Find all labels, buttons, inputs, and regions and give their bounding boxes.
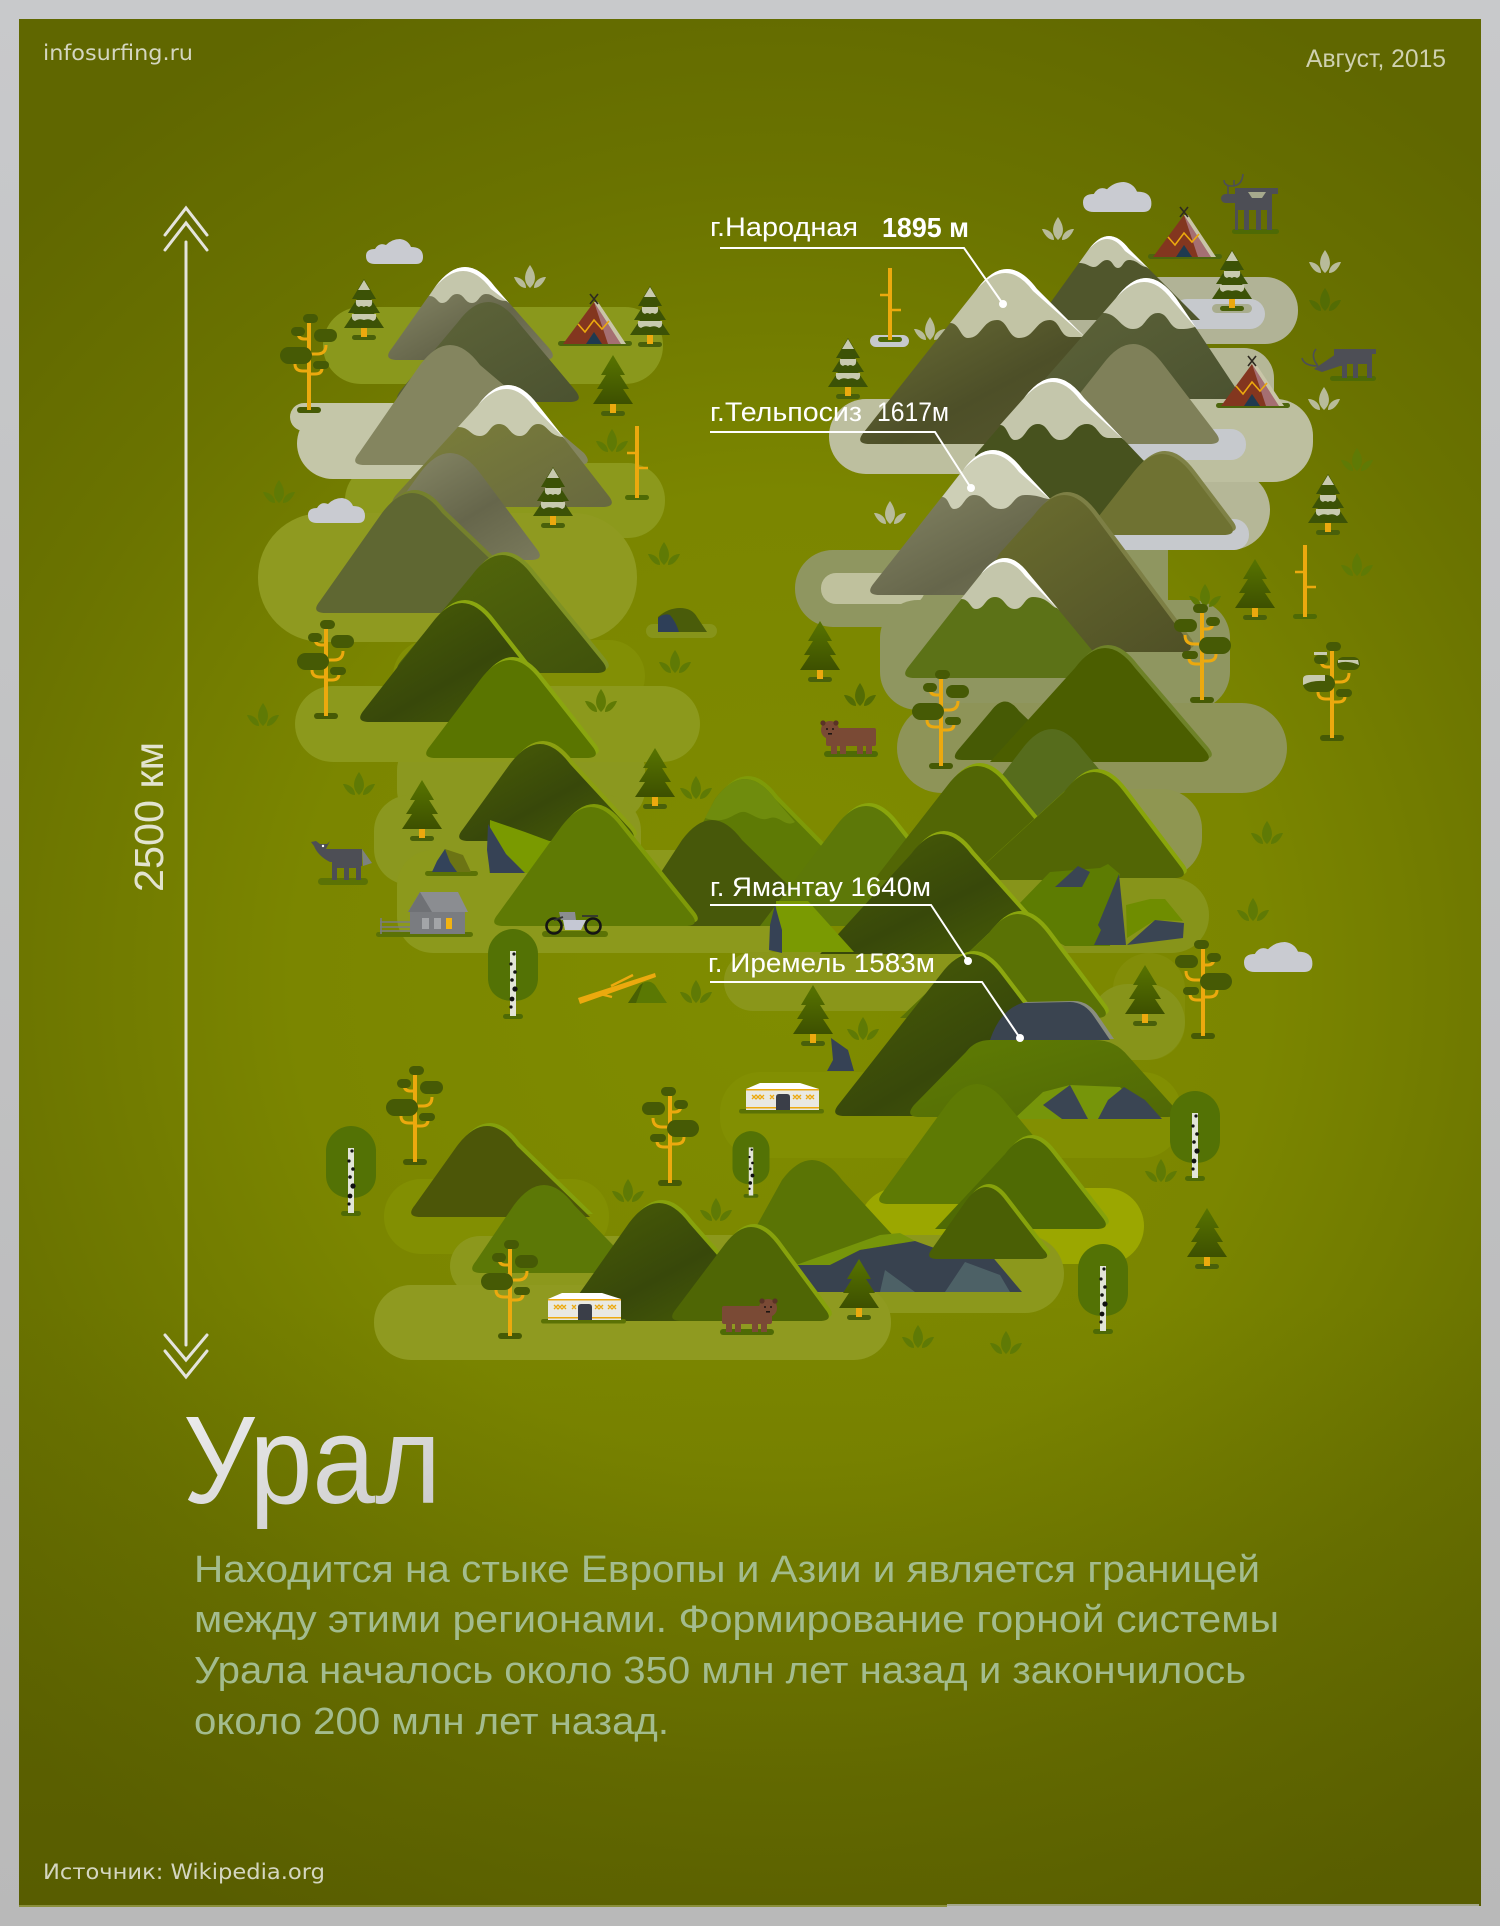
callout: Yamantau [710, 872, 972, 965]
icon: cloud [366, 239, 423, 264]
icon: birch [1078, 1244, 1128, 1334]
distance label: 2500 км [126, 742, 172, 892]
terrain bands: soft rounded land and snow fields [258, 277, 1313, 1360]
mountain: moss peak [960, 492, 1194, 652]
description text block [194, 1549, 1279, 1743]
icon: chum tent [1148, 207, 1222, 259]
site name: infosurfing.ru [43, 41, 193, 65]
sprout behind Narodnaya [914, 317, 946, 340]
description text block: Находится на стыке Европы и Азии и является границей [194, 1549, 1260, 1591]
callout: Telposiz [710, 397, 975, 492]
mountain: small dark peak [955, 702, 1070, 760]
callout: Iremel [708, 948, 1024, 1042]
icon: snowy spruce [1308, 474, 1348, 535]
mountain: far snowy peak [1038, 236, 1200, 320]
callout: Narodnaya: 1895 м [882, 212, 969, 243]
icon: cloud [1083, 182, 1151, 212]
icon: spruce [1125, 965, 1165, 1026]
broad green ridge with rocks [910, 1040, 1176, 1119]
icon: bear [820, 720, 878, 757]
icon: pine mirrored [1175, 940, 1232, 1039]
mountain: deep green peak [360, 600, 567, 722]
icon: spruce [1187, 1208, 1227, 1269]
icon: birch [488, 929, 538, 1019]
icon: snowy spruce [828, 338, 868, 399]
mound and fallen tree [578, 973, 667, 1004]
icon: yurt [739, 1083, 824, 1114]
icon: motorbike [542, 912, 608, 937]
callout: Narodnaya [710, 212, 1007, 308]
mountain: Narodnaya [860, 269, 1184, 444]
mountains: southern range [411, 1084, 1109, 1321]
mountain: dark peak in front [626, 820, 830, 926]
icon: spruce [793, 985, 833, 1046]
icon: snowy pine [1303, 642, 1360, 741]
rock slab [487, 820, 562, 873]
callout: Iremel: г. Иремель 1583м [708, 948, 935, 978]
icon: cloud [308, 498, 365, 523]
icon: dead tree on ice [870, 268, 909, 347]
mountain: grey peak [1040, 344, 1219, 444]
mountain: south front peak [672, 1224, 832, 1321]
mountain: south large peak [879, 1084, 1090, 1204]
mountain: middle peak [760, 803, 978, 926]
icon: snowy spruce [533, 467, 573, 528]
mountain: south dark peak [560, 1200, 778, 1321]
mountain: far right central [970, 769, 1187, 878]
mountain: large dark green peak [990, 645, 1212, 762]
mountain: grey peak [355, 345, 588, 465]
small rock with lower pill [425, 849, 478, 876]
callout: Narodnaya: г.Народная [710, 212, 858, 242]
mountain: south green peak [472, 1185, 640, 1273]
description text block: около 200 млн лет назад. [194, 1701, 669, 1743]
icon: pine [481, 1240, 538, 1339]
mountain: dark peak [397, 302, 579, 402]
icon: spruce [800, 621, 840, 682]
icon: spruce [593, 355, 633, 416]
mountain: south central peak [720, 1160, 945, 1292]
icon: birch [326, 1126, 376, 1216]
mountain: pale-topped green peak [650, 776, 903, 926]
mountain: moss peak [316, 490, 541, 613]
small rock near yurt [827, 1038, 854, 1071]
icon: snowy spruce on ice [1212, 250, 1252, 313]
mountain: Iremel [835, 951, 1107, 1116]
icon: spruce [402, 780, 442, 841]
mountain: Telposiz [870, 450, 1140, 595]
icon: pine [386, 1066, 443, 1165]
icon: yurt [541, 1293, 626, 1324]
mountain: snowy dark peak [1034, 278, 1239, 399]
icon: wolf [311, 841, 372, 885]
icon: pine [280, 314, 337, 413]
mountain: south east peak [935, 1135, 1109, 1229]
icon: spruce [1235, 559, 1275, 620]
mountain: small south east peak [929, 1184, 1050, 1259]
mountain: bright green peak [426, 657, 599, 758]
callout: Telposiz: г.Тельпосиз [710, 397, 862, 427]
blue rock range [796, 1233, 1022, 1292]
icon: pine mirrored [1174, 604, 1231, 703]
icon: dead tree [625, 426, 649, 500]
mountains: left northern range [316, 267, 612, 758]
mountain: south west dark peak [411, 1123, 593, 1217]
date: Август, 2015 [1306, 45, 1446, 73]
mountain: snowy olive peak [392, 385, 612, 507]
mountain: Yamantau [820, 831, 1063, 954]
icon: bear mirrored [720, 1298, 778, 1335]
mountain: right central [874, 763, 1088, 880]
source: Источник: Wikipedia.org [43, 1860, 325, 1884]
icon: spruce [635, 748, 675, 809]
icon: house with fence [376, 892, 473, 937]
small rock spot with pill [646, 608, 717, 638]
dark rock dome [990, 1001, 1114, 1040]
mountains: right northern range [860, 236, 1239, 762]
icon: chum tent [1216, 356, 1290, 408]
mountain: lower right [900, 911, 1109, 1018]
icon: grazing reindeer [1302, 349, 1376, 381]
title: Урал [183, 1392, 441, 1530]
icon: spruce [839, 1259, 879, 1320]
mountain: snowy forest peak [975, 378, 1205, 525]
sprouts scattered over the map [247, 217, 1373, 1354]
icon: reindeer [1221, 174, 1279, 234]
mountain: snowy grey peak [388, 267, 553, 360]
mountain: behind central [960, 729, 1150, 830]
callout: Yamantau: г. Ямантау 1640м [710, 872, 931, 902]
mountain: olive peak [1084, 451, 1236, 535]
description text block: Урала началось около 350 млн лет назад и закончилось [194, 1650, 1246, 1692]
mountains: central massif [459, 729, 1187, 1119]
mountain: snowy green peak [905, 558, 1115, 678]
icon: small birch [732, 1131, 770, 1198]
green slab with rock [769, 901, 854, 953]
callout: Telposiz: 1617м [877, 397, 949, 427]
icon: cloud [1244, 942, 1312, 972]
icon: birch [1170, 1091, 1220, 1181]
icon: pine [912, 670, 969, 769]
description text block: между этими регионами. Формирование горной системы [194, 1599, 1279, 1641]
icon: snowy spruce [630, 286, 670, 347]
green hill with blue rocks [1018, 864, 1184, 946]
icon: pine [297, 620, 354, 719]
mountain: dark peak with bright ridge [459, 741, 637, 841]
height arrow 2500 km [165, 208, 207, 1377]
mountain: wide green peak [494, 804, 698, 926]
icon: pine mirrored [642, 1087, 699, 1186]
mountain: grey lower peak [362, 453, 540, 560]
icon: dead tree [1293, 545, 1317, 619]
mountain: green peak [397, 552, 609, 673]
icon: snowy spruce [344, 279, 384, 340]
icon: chum tent [558, 294, 632, 346]
